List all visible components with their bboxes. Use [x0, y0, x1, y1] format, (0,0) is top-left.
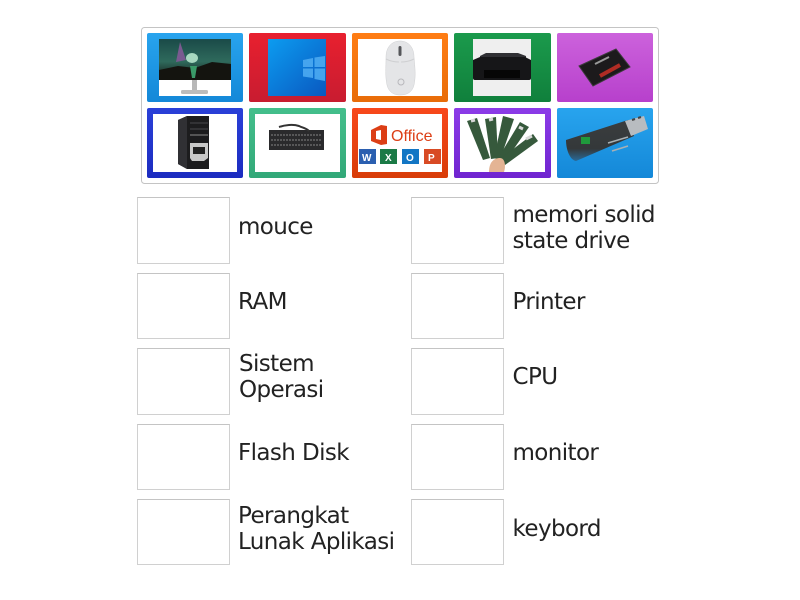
icon tile: printer	[454, 33, 551, 102]
label: Flash Disk: Flash Disk	[238, 440, 349, 466]
label: Sistem Operasi	[239, 351, 324, 403]
answer box: row 3 left	[137, 348, 230, 415]
answer box: row 2 right	[411, 273, 504, 339]
label: monitor: monitor	[512, 440, 598, 466]
answer box: row 4 left	[137, 424, 230, 490]
icon tile: office applications	[352, 108, 448, 178]
label: Perangkat Lunak Aplikasi	[238, 503, 394, 555]
answer box: row 5 left	[137, 499, 230, 565]
answer box: row 1 left	[137, 197, 230, 264]
icon tile: RAM modules	[454, 108, 551, 178]
label: memori solid state drive: state drive	[512, 228, 630, 254]
answer box: row 2 left	[137, 273, 230, 339]
answer box: row 5 right	[411, 499, 504, 565]
panel: image tray	[141, 27, 659, 184]
icon tile: office applications: P	[428, 153, 435, 164]
label: Perangkat Lunak Aplikasi: Perangkat	[238, 503, 349, 529]
label: Perangkat Lunak Aplikasi: Lunak Aplikasi	[238, 529, 394, 555]
label: memori solid state drive	[512, 202, 655, 254]
answer box: row 4 right	[411, 424, 504, 490]
icon tile: office applications: X	[385, 153, 392, 164]
icon tile: solid state drive	[557, 33, 653, 102]
icon tile: office applications: O	[406, 153, 414, 164]
label: CPU: CPU	[512, 364, 557, 390]
icon tile: windows desktop	[249, 33, 346, 102]
answer box: row 3 right	[411, 348, 504, 415]
label: Sistem Operasi: Sistem	[239, 351, 314, 377]
label: memori solid state drive: memori solid	[512, 202, 655, 228]
icon tile: office applications: Office	[391, 128, 433, 145]
label: RAM: RAM	[238, 289, 287, 315]
label: Printer: Printer	[512, 289, 585, 315]
label: keybord: keybord	[512, 516, 601, 542]
icon tile: monitor	[147, 33, 243, 102]
label: mouce: mouce	[238, 214, 313, 240]
icon tile: mouse	[352, 33, 448, 102]
icon tile: office applications: W	[362, 153, 372, 164]
icon tile: CPU tower	[147, 108, 243, 178]
icon tile: keyboard	[249, 108, 346, 178]
label: Sistem Operasi: Operasi	[239, 377, 324, 403]
answer box: row 1 right	[411, 197, 504, 264]
icon tile: flash disk	[557, 108, 653, 178]
